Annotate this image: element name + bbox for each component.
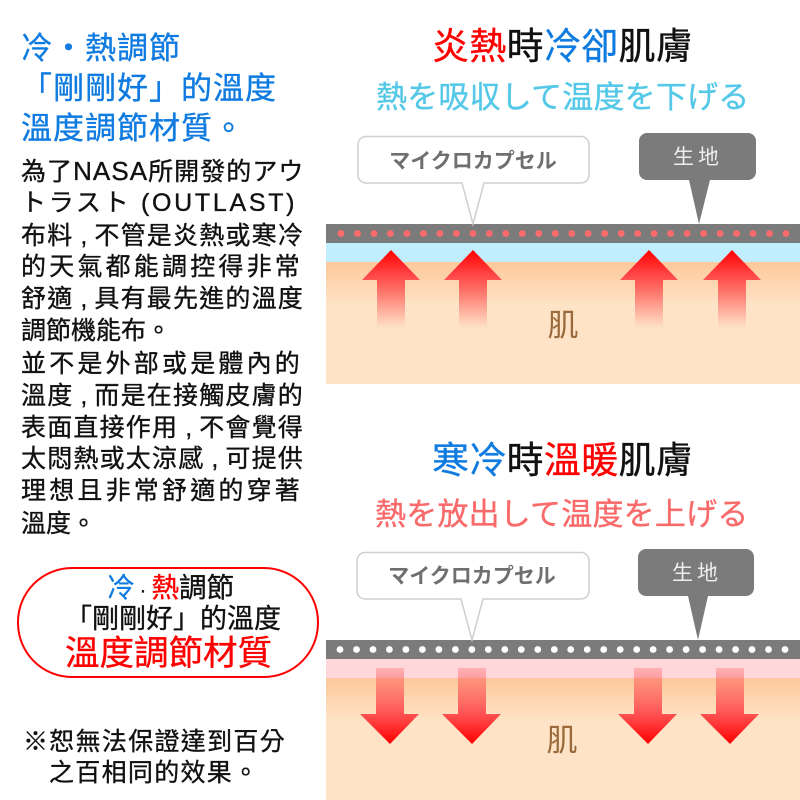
- footnote: ※恕無法保證達到百分: [23, 728, 286, 756]
- callout: microcapsule: マイクロカプセル: [389, 150, 557, 173]
- left heading: 溫度調節材質。: [21, 111, 245, 146]
- left heading: [21, 31, 277, 146]
- callout: fabric: 生地: [672, 562, 722, 585]
- body text: 舒適 具有最先進的溫度: [21, 285, 304, 313]
- subheading: absorb heat: 熱を吸収して温度を下げる: [376, 80, 749, 115]
- label: skin: 肌: [546, 723, 578, 758]
- callout pill: 冷 熱調節: [107, 572, 234, 603]
- body text: 太悶熱或太涼感 可提供: [21, 445, 304, 473]
- arrows up: [362, 250, 761, 328]
- body text: ,: [80, 382, 87, 410]
- label: skin: 肌: [548, 308, 578, 343]
- warming layer: [326, 659, 800, 678]
- skin layer: [326, 678, 800, 800]
- callout pill: ·: [140, 580, 146, 602]
- body text: ,: [80, 285, 87, 313]
- left heading: 冷・熱調節: [21, 31, 181, 66]
- heading: cold: 寒冷時溫暖肌膚: [432, 440, 693, 481]
- callout pill: 溫度調節材質: [65, 635, 272, 673]
- callout: fabric: [638, 549, 754, 640]
- footnote: [23, 728, 286, 787]
- diagram: hot: [326, 133, 800, 384]
- fabric band: [326, 224, 800, 243]
- footnote: 之百相同的效果。: [49, 759, 259, 787]
- callout: microcapsule: [358, 136, 589, 224]
- body text: 理想且非常舒適的穿著: [21, 477, 303, 505]
- microcapsule dots: [338, 230, 789, 237]
- diagram: cold: [326, 549, 800, 800]
- body text: [21, 156, 304, 538]
- callout pill: 「剛剛好」的溫度: [65, 604, 281, 634]
- callout: microcapsule: マイクロカプセル: [388, 565, 556, 588]
- body text: 溫度。: [21, 510, 96, 538]
- heading: hot: 炎熱時冷卻肌膚: [432, 26, 693, 67]
- fabric band: [326, 640, 800, 659]
- body text: 並不是外部或是體內的: [21, 350, 303, 378]
- left heading: 「剛剛好」的溫度: [21, 71, 277, 106]
- callout pill: [17, 567, 319, 678]
- subheading: release heat: 熱を放出して温度を上げる: [375, 497, 748, 532]
- callout: fabric: [639, 133, 756, 224]
- body text: ,: [185, 414, 192, 442]
- body text: 調節機能布。: [21, 317, 171, 345]
- body text: 溫度 而是在接觸皮膚的: [21, 382, 304, 410]
- skin layer: [326, 262, 800, 384]
- body text: 的天氣都能調控得非常: [21, 253, 303, 281]
- body text: 為了NASA所開發的アウ: [21, 156, 304, 186]
- body text: ,: [211, 445, 218, 473]
- callout: fabric: 生地: [673, 146, 723, 169]
- body text: トラスト (OUTLAST): [21, 189, 297, 217]
- callout: microcapsule: [357, 552, 589, 640]
- microcapsule dots: [337, 646, 788, 653]
- arrows down: [360, 668, 759, 744]
- body text: 表面直接作用 不會覺得: [21, 414, 304, 442]
- body text: 布料 不管是炎熱或寒冷: [21, 222, 304, 250]
- body text: ,: [80, 222, 87, 250]
- cooling layer: [326, 243, 800, 262]
